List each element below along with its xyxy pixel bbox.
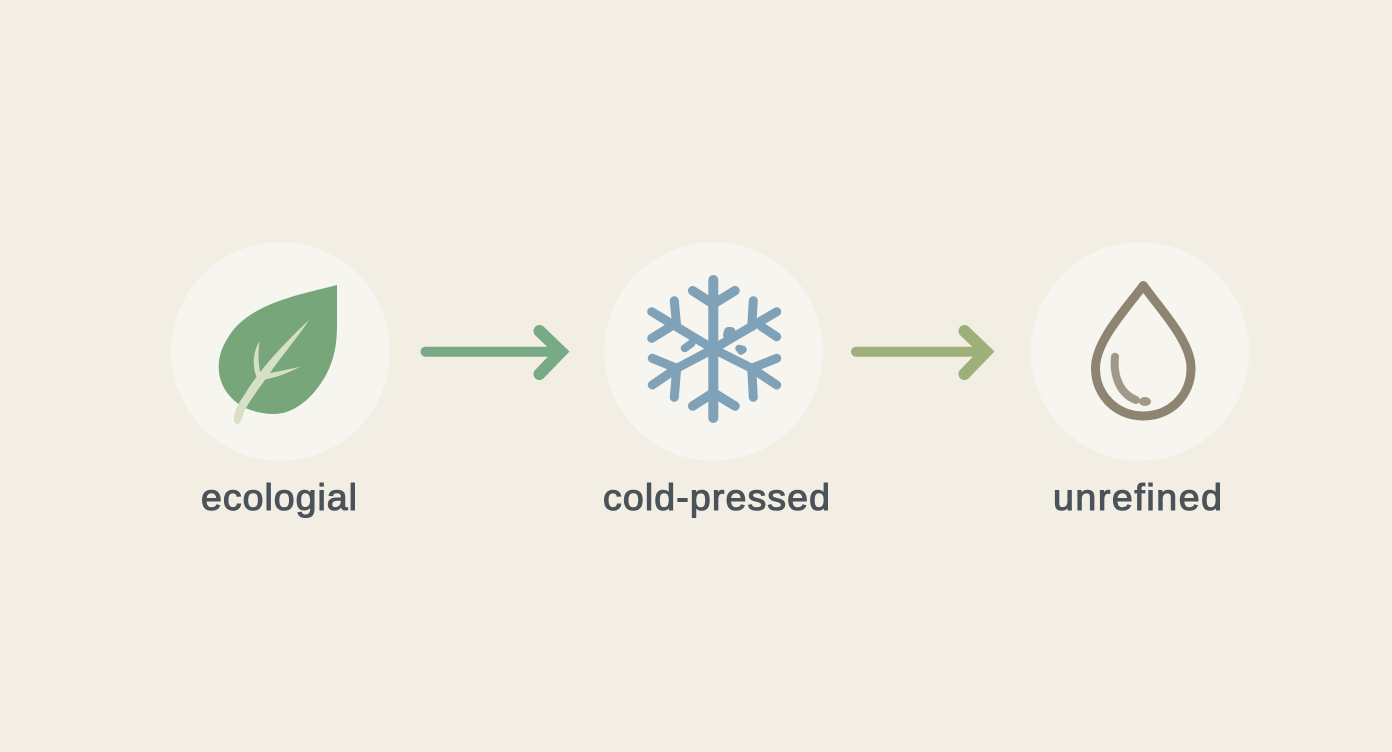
- step: cold-pressed: [604, 242, 823, 461]
- icon circle: ecologial: [171, 242, 390, 461]
- step: unrefined: [1030, 242, 1250, 461]
- label: unrefined: unrefined: [1053, 476, 1222, 518]
- icon: leaf: [219, 285, 337, 424]
- label: cold-pressed: cold-pressed: [603, 476, 830, 518]
- icon: oil drop: [1096, 286, 1191, 416]
- arrow: ecologial to cold-pressed: [426, 331, 561, 374]
- icon circle: cold-pressed: [604, 242, 823, 461]
- arrow: cold-pressed to unrefined: [856, 331, 986, 374]
- step: ecologial: [171, 242, 390, 461]
- icon: snowflake: [652, 280, 777, 418]
- icon circle: unrefined: [1030, 242, 1250, 461]
- label: ecologial: ecologial: [201, 476, 357, 518]
